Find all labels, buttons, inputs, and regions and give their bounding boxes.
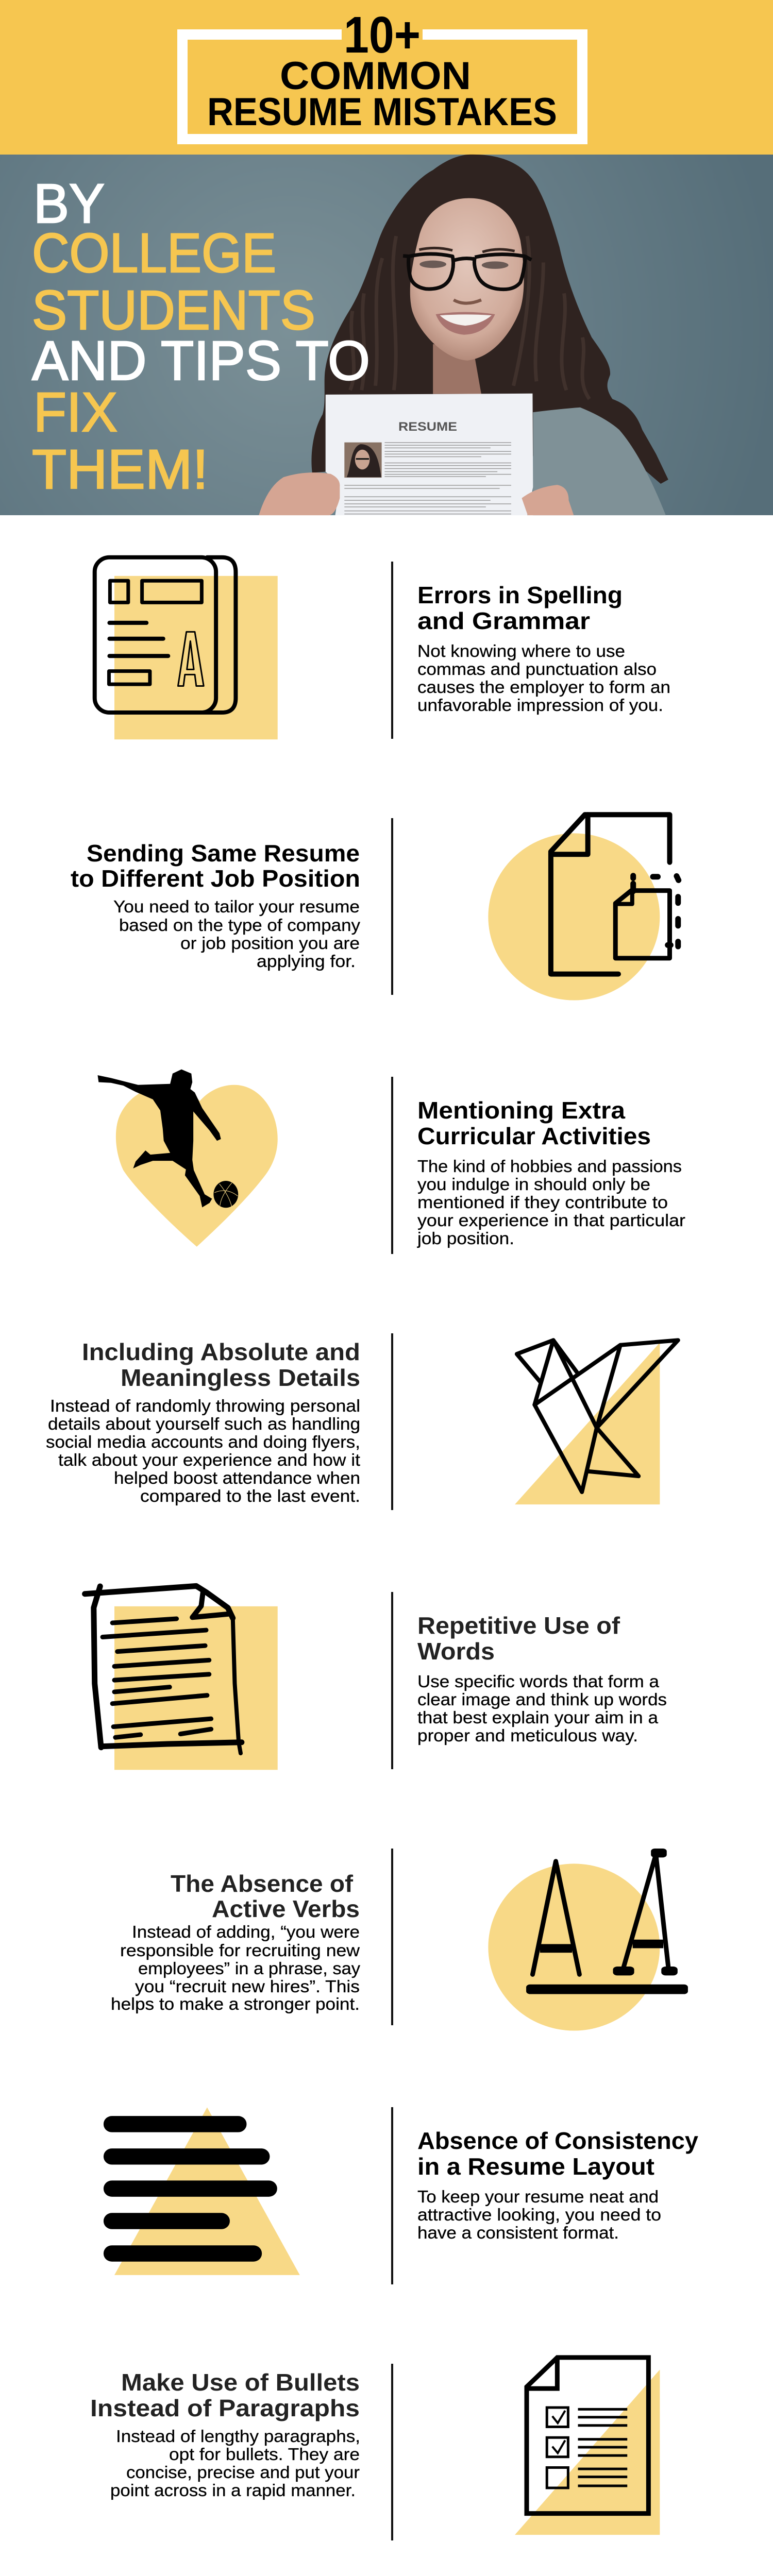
heading: Make Use of Bullets bbox=[121, 2369, 360, 2396]
heading: Errors in Spelling bbox=[417, 582, 623, 608]
icon: scribbled document bbox=[85, 1586, 278, 1770]
icon: origami bird bbox=[515, 1340, 678, 1504]
heading bbox=[171, 1870, 360, 1922]
body text: you “recruit new hires”. This bbox=[135, 1977, 360, 1996]
header banner bbox=[0, 0, 773, 155]
body text: proper and meticulous way. bbox=[417, 1726, 638, 1745]
heading: Curricular Activities bbox=[417, 1123, 651, 1149]
hero headline: AND TIPS TO bbox=[32, 329, 370, 392]
panel: extra curricular activities bbox=[97, 1070, 685, 1254]
body text: Use specific words that form a bbox=[417, 1672, 660, 1691]
title: RESUME MISTAKES bbox=[207, 90, 557, 134]
hero headline: FIX bbox=[33, 381, 117, 443]
body text: helps to make a stronger point. bbox=[111, 1994, 360, 2013]
photo: woman holding resume bbox=[259, 155, 668, 515]
body text: Instead of adding, “you were bbox=[132, 1922, 360, 1941]
heading bbox=[417, 2127, 698, 2180]
body text: unfavorable impression of you. bbox=[417, 696, 663, 715]
body text bbox=[417, 641, 670, 715]
body text bbox=[417, 2187, 661, 2242]
heading: The Absence of bbox=[171, 1870, 354, 1897]
icon: document with letter A bbox=[95, 557, 278, 739]
body text: concise, precise and put your bbox=[126, 2463, 360, 2482]
body text: To keep your resume neat and bbox=[417, 2187, 659, 2206]
body text bbox=[417, 1157, 685, 1248]
heading bbox=[417, 582, 623, 634]
title: 10+ bbox=[344, 6, 421, 64]
title bbox=[207, 6, 557, 134]
body text bbox=[417, 1672, 667, 1745]
hero headline: STUDENTS bbox=[32, 279, 315, 341]
body text: point across in a rapid manner. bbox=[110, 2481, 356, 2500]
heading: in a Resume Layout bbox=[417, 2153, 654, 2180]
hands bbox=[259, 472, 340, 515]
body text: attractive looking, you need to bbox=[417, 2205, 661, 2224]
heading bbox=[90, 2369, 360, 2421]
body text: social media accounts and doing flyers, bbox=[46, 1432, 360, 1451]
body text: or job position you are bbox=[180, 934, 360, 953]
shirt bbox=[533, 408, 666, 515]
heading bbox=[71, 840, 360, 892]
panel: sending same resume bbox=[71, 815, 679, 1001]
heading: Instead of Paragraphs bbox=[90, 2395, 360, 2421]
heading: Repetitive Use of bbox=[417, 1612, 620, 1639]
body text: applying for. bbox=[257, 952, 356, 971]
hero photo panel bbox=[0, 155, 773, 515]
hero headline: THEM! bbox=[32, 438, 208, 500]
heading: Mentioning Extra bbox=[417, 1097, 625, 1124]
glasses bbox=[403, 254, 531, 290]
heading: Meaningless Details bbox=[121, 1364, 360, 1391]
resume label in photo: RESUME bbox=[398, 420, 457, 434]
body text: Not knowing where to use bbox=[417, 641, 625, 660]
body text: helped boost attendance when bbox=[114, 1468, 360, 1487]
hero headline bbox=[32, 172, 370, 500]
resume body lines bbox=[344, 443, 511, 514]
panel: absence of active verbs bbox=[111, 1849, 688, 2031]
title: COMMON bbox=[280, 54, 471, 98]
body text bbox=[111, 1922, 361, 2013]
body text: based on the type of company bbox=[119, 916, 361, 935]
panel: repetitive use of words bbox=[85, 1586, 667, 1770]
heading: Words bbox=[417, 1638, 495, 1665]
heading: Including Absolute and bbox=[82, 1338, 360, 1365]
nose bbox=[453, 300, 481, 303]
heading bbox=[417, 1097, 651, 1149]
heading bbox=[417, 1612, 620, 1665]
body text: employees” in a phrase, say bbox=[138, 1959, 361, 1978]
panel: errors in spelling and grammar bbox=[95, 557, 670, 739]
icon: text bars on triangle bbox=[104, 2107, 300, 2275]
body text: You need to tailor your resume bbox=[113, 897, 360, 916]
face bbox=[410, 198, 524, 361]
body text: clear image and think up words bbox=[417, 1690, 667, 1709]
body text: responsible for recruiting new bbox=[120, 1941, 360, 1960]
heading: Absence of Consistency bbox=[417, 2127, 698, 2154]
resume thumbnail bbox=[344, 443, 382, 478]
panel: absence of consistency bbox=[104, 2107, 698, 2284]
mouth bbox=[436, 312, 495, 335]
body text: your experience in that particular bbox=[417, 1211, 685, 1230]
hero headline: COLLEGE bbox=[32, 222, 276, 284]
body text: mentioned if they contribute to bbox=[417, 1193, 668, 1212]
eyes bbox=[419, 261, 446, 268]
panel: bullets instead of paragraphs bbox=[90, 2358, 660, 2540]
hero headline: BY bbox=[33, 172, 105, 234]
heading: Sending Same Resume bbox=[87, 840, 360, 867]
body text: causes the employer to form an bbox=[417, 677, 670, 697]
body text: compared to the last event. bbox=[140, 1486, 360, 1505]
panel: absolute and meaningless details bbox=[46, 1333, 678, 1510]
icon: footballer on heart bbox=[97, 1070, 278, 1247]
body text: have a consistent format. bbox=[417, 2223, 619, 2242]
body text: Instead of randomly throwing personal bbox=[50, 1396, 360, 1415]
body text bbox=[113, 897, 361, 971]
body text: Instead of lengthy paragraphs, bbox=[116, 2427, 360, 2446]
eyebrows bbox=[419, 248, 515, 252]
body text bbox=[110, 2427, 360, 2500]
heading: Active Verbs bbox=[212, 1895, 360, 1922]
icon: documents with dashed outline bbox=[488, 815, 679, 1001]
body text: The kind of hobbies and passions bbox=[417, 1157, 682, 1176]
body text: commas and punctuation also bbox=[417, 659, 657, 679]
icon: checklist document bbox=[515, 2358, 660, 2535]
heading: and Grammar bbox=[417, 607, 590, 634]
resume paper bbox=[326, 394, 533, 515]
body text: opt for bullets. They are bbox=[169, 2445, 360, 2464]
icon: letter A pair bbox=[488, 1849, 688, 2031]
title frame bbox=[182, 35, 582, 139]
body text: details about yourself such as handling bbox=[48, 1414, 360, 1433]
body text bbox=[46, 1396, 360, 1505]
body text: talk about your experience and how it bbox=[58, 1450, 360, 1469]
body text: that best explain your aim in a bbox=[417, 1708, 659, 1727]
body text: you indulge in should only be bbox=[417, 1175, 650, 1194]
heading: to Different Job Position bbox=[71, 865, 360, 892]
body text: job position. bbox=[417, 1229, 514, 1248]
neck bbox=[433, 344, 481, 394]
heading bbox=[82, 1338, 360, 1391]
